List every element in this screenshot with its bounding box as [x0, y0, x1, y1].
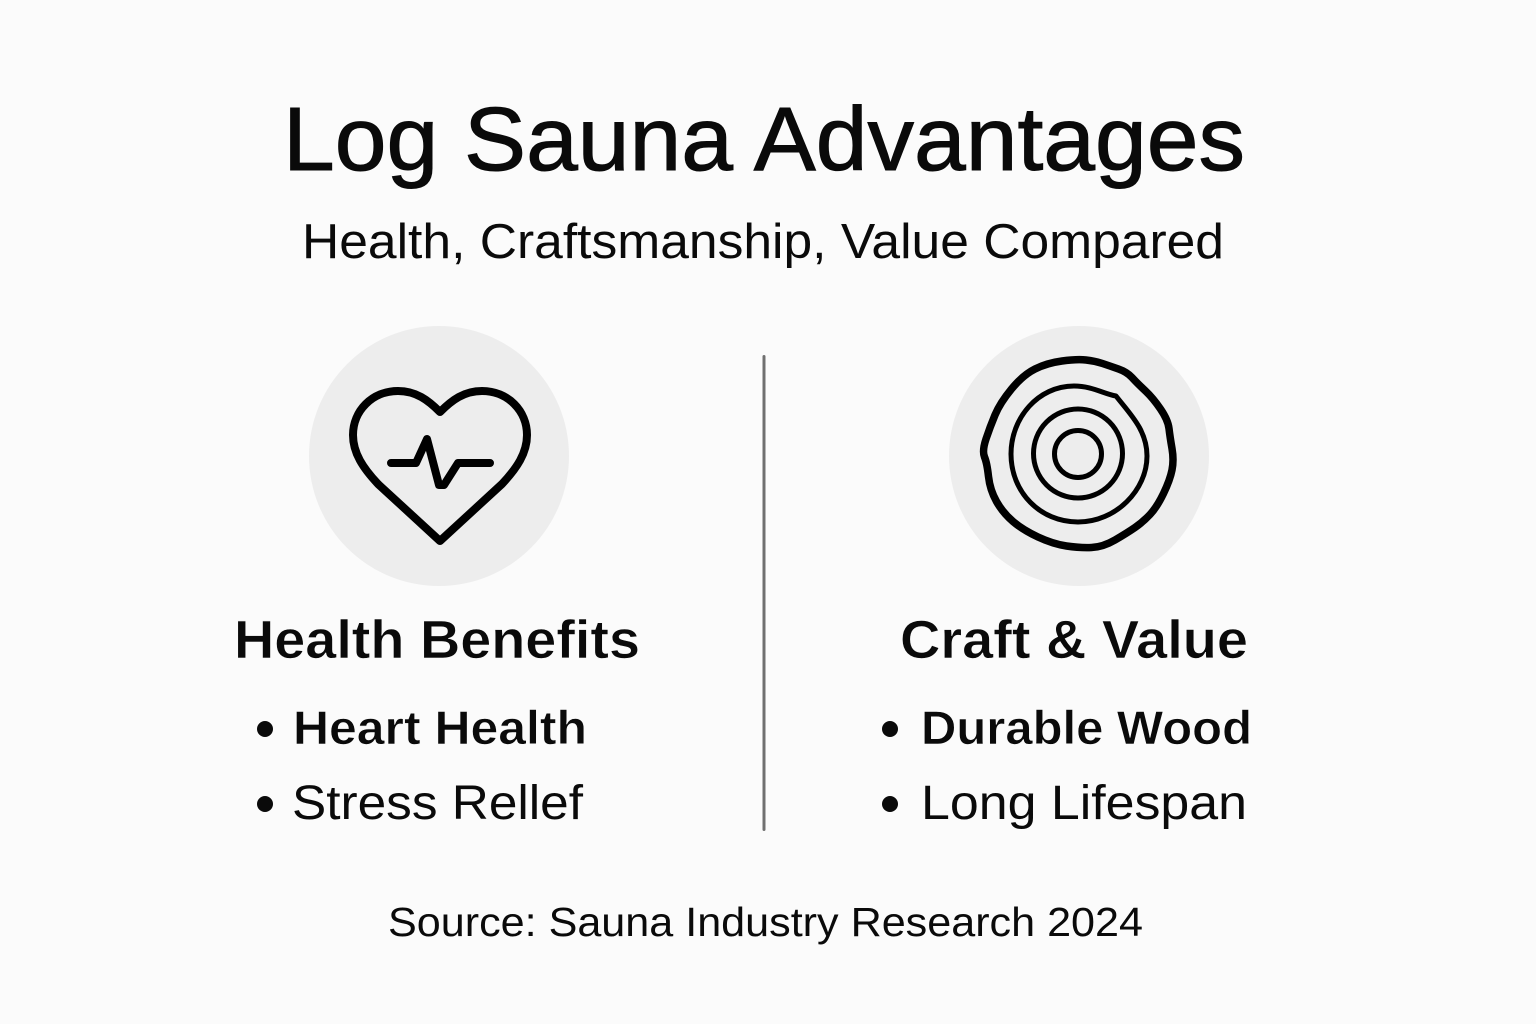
divider: [762, 355, 766, 831]
bullet list: craft and value: Long Lifespan: [921, 777, 1247, 830]
panel: craft and value: [882, 326, 1252, 830]
bullet list: health benefits: Heart Health: [293, 701, 587, 754]
source note: Source: Sauna Industry Research 2024: [388, 899, 1143, 945]
subtitle: Health, Craftsmanship, Value Compared: [302, 215, 1224, 269]
bullet list: health benefits: [257, 701, 587, 830]
title: Log Sauna Advantages: [283, 90, 1245, 190]
bullet list: health benefits: Stress Rellef: [292, 777, 584, 830]
icon: heart with pulse: [309, 326, 569, 586]
bullet list: craft and value: Durable Wood: [921, 701, 1252, 754]
heading: health benefits: Health Benefits: [234, 610, 640, 670]
panel: health benefits: [234, 326, 640, 830]
icon: log cross-section rings: [949, 326, 1209, 586]
bullet list: craft and value: [882, 701, 1252, 830]
heading: craft and value: Craft & Value: [900, 610, 1248, 670]
